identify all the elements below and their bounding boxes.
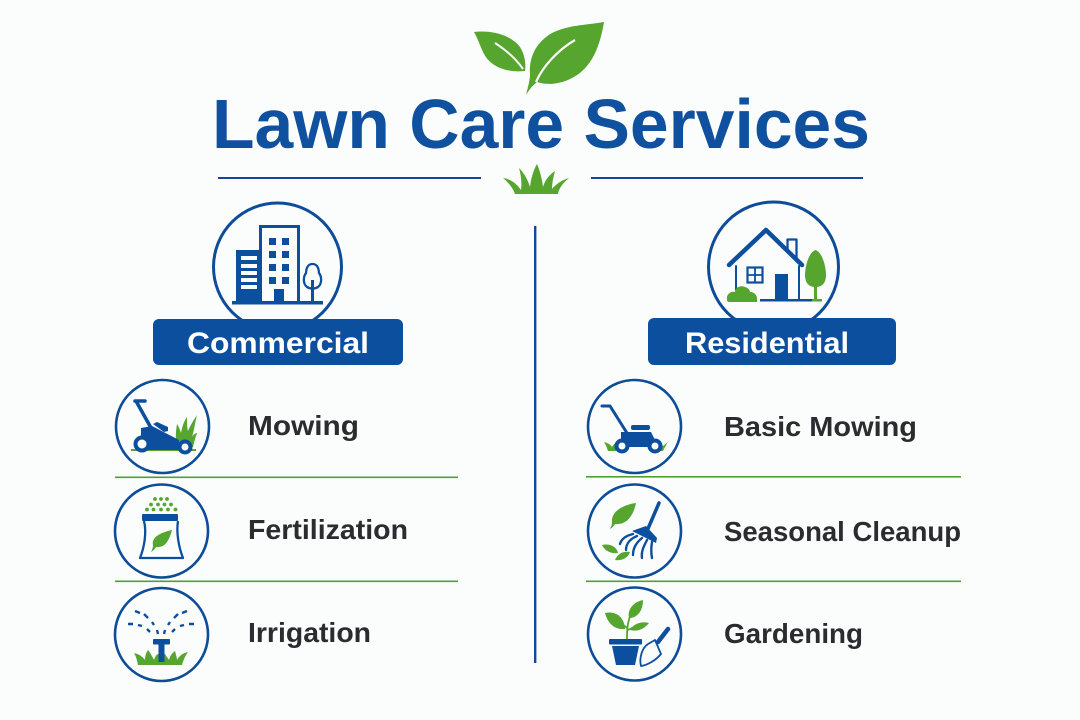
- badge: commercial: Commercial: [187, 327, 369, 360]
- panel: residential: [648, 202, 896, 365]
- panel: residential services list: [586, 380, 961, 680]
- title: Lawn Care Services: [212, 85, 870, 163]
- label: mowing: Mowing: [248, 410, 359, 441]
- service: fertilization: [115, 484, 208, 578]
- service: seasonal cleanup: [588, 484, 681, 578]
- badge: residential: Residential: [685, 327, 849, 360]
- label: fertilization: Fertilization: [248, 514, 408, 545]
- icon: title leaves: [474, 22, 604, 95]
- icon: office buildings: [214, 203, 342, 331]
- panel: commercial services list: [115, 380, 458, 681]
- central vertical divider: [534, 226, 536, 663]
- service: gardening: [588, 588, 681, 680]
- service: mowing: [116, 380, 209, 473]
- icon: house with tree: [708, 202, 838, 332]
- label: basic mowing: Basic Mowing: [724, 411, 917, 442]
- label: seasonal cleanup: Seasonal Cleanup: [724, 516, 961, 547]
- divider with grass icon: [218, 164, 863, 194]
- panel: commercial: [153, 203, 403, 365]
- service: irrigation: [115, 588, 208, 681]
- badge: commercial: [153, 319, 403, 365]
- label: irrigation: Irrigation: [248, 617, 371, 648]
- service: basic mowing: [588, 380, 681, 473]
- label: gardening: Gardening: [724, 618, 863, 649]
- badge: residential: [648, 318, 896, 365]
